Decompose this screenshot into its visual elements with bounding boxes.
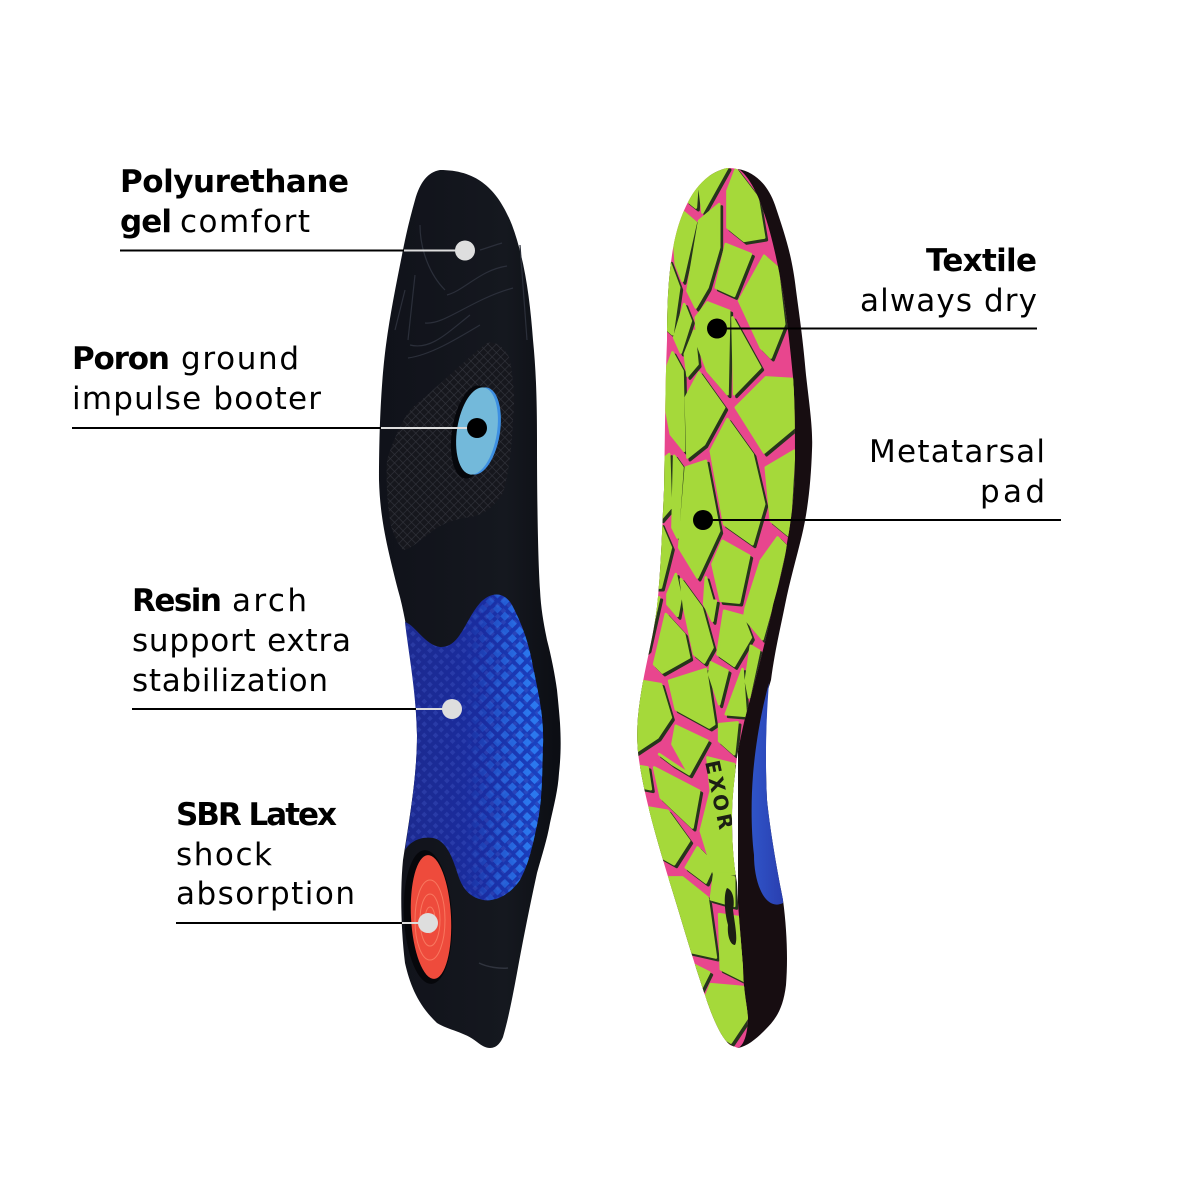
heading text: Metatarsal <box>869 434 1045 470</box>
leader line <box>717 328 1037 330</box>
left insole: underside view <box>379 170 561 1048</box>
leader line <box>120 250 460 252</box>
forefoot tread lines <box>395 225 527 358</box>
green cells <box>632 167 794 1042</box>
callout: resin arch <box>132 583 462 719</box>
leader line <box>72 427 470 429</box>
heading text: gel <box>120 204 172 240</box>
brand logo text: EXOR <box>700 758 738 832</box>
heading text: arch <box>232 583 307 619</box>
insole body <box>379 170 561 1048</box>
heading text <box>869 434 1045 510</box>
pink web <box>637 168 795 1048</box>
callout: polyurethane gel <box>120 164 475 260</box>
red SBR latex heel pad <box>408 854 454 980</box>
leader line <box>703 519 1061 521</box>
marker dot <box>693 510 713 530</box>
heading text: support extra <box>132 623 351 659</box>
heading text: SBR Latex <box>176 797 337 833</box>
mesh forefoot zone <box>387 342 514 550</box>
heading text: Polyurethane <box>120 164 349 200</box>
heading text: pad <box>980 474 1045 510</box>
leader line <box>176 922 424 924</box>
side blue arch edge <box>752 683 783 905</box>
heel crater <box>401 849 455 985</box>
cell shadows <box>635 170 797 1045</box>
infographic canvas <box>72 168 1061 1048</box>
marker dot <box>467 418 487 438</box>
marker dot <box>442 699 462 719</box>
heading text: shock <box>176 837 272 873</box>
textile top cover <box>637 168 795 1048</box>
heading text: Textile <box>926 243 1037 279</box>
heading text <box>132 583 351 699</box>
black foam backing <box>738 169 812 1048</box>
heading text: absorption <box>176 876 355 912</box>
heading text <box>860 243 1037 319</box>
heading text: Resin <box>132 583 222 619</box>
heading text: impulse booter <box>72 381 321 417</box>
heading text <box>120 164 349 240</box>
heading text: comfort <box>180 204 310 240</box>
callout: metatarsal pad <box>693 434 1061 530</box>
heading text <box>72 341 321 417</box>
heading text: always dry <box>860 283 1037 319</box>
callout: SBR latex <box>176 797 438 933</box>
leader line <box>132 708 448 710</box>
heading text: stabilization <box>132 663 328 699</box>
heading text: Poron <box>72 341 170 377</box>
heading text: ground <box>181 341 299 377</box>
right insole: top view <box>630 160 820 1060</box>
poron blue disc <box>445 382 507 482</box>
marker dot <box>455 240 475 260</box>
brand logo mark <box>725 888 736 945</box>
marker dot <box>418 913 438 933</box>
callout: poron <box>72 341 487 438</box>
marker dot <box>707 318 727 338</box>
blue resin arch support <box>405 594 544 900</box>
heel mark <box>479 963 508 968</box>
callout: textile <box>707 243 1037 338</box>
heading text <box>176 797 355 912</box>
